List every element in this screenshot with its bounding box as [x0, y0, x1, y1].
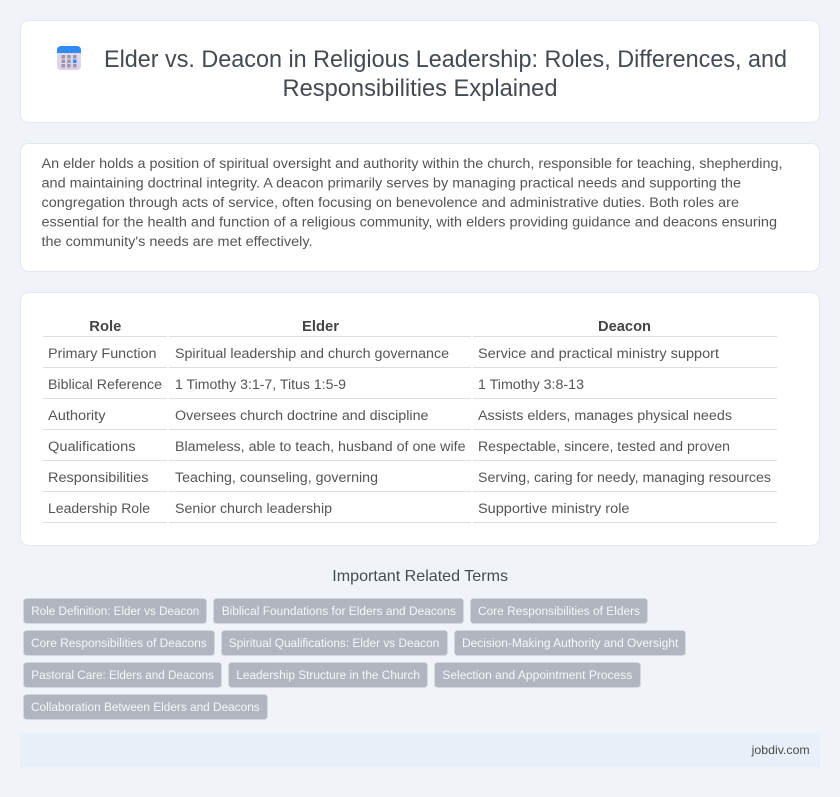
table row: primary function — [48, 346, 719, 362]
chip: core responsibilities of deacons: Core Responsibilities of Deacons — [31, 636, 207, 650]
title — [104, 46, 787, 102]
table row: biblical reference: 1 Timothy 3:1-7, Titus 1:5-9 — [175, 377, 346, 393]
panel: title header — [20, 20, 820, 122]
chip: spiritual qualifications: Spiritual Qualifications: Elder vs Deacon — [229, 636, 439, 650]
chip: spiritual qualifications — [222, 630, 448, 656]
chip: biblical foundations: Biblical Foundations for Elders and Deacons — [222, 604, 456, 618]
table row: qualifications: Qualifications — [48, 439, 136, 455]
table row: leadership role: Senior church leadership — [175, 501, 332, 517]
text block: elder and deacon summary — [42, 156, 782, 250]
title: Elder vs. Deacon in Religious Leadership: Roles, Differences, and — [104, 46, 787, 73]
table row: responsibilities — [48, 470, 771, 486]
chip: pastoral care — [24, 662, 222, 688]
text block: elder and deacon summary: the community's needs are met effectively. — [42, 234, 312, 250]
chip: core responsibilities of elders — [470, 598, 648, 624]
table header row: Elder — [302, 319, 339, 335]
table row: authority: Assists elders, manages physical needs — [478, 408, 732, 424]
table header row: Role — [89, 319, 121, 335]
table row: responsibilities: Serving, caring for needy, managing resources — [478, 470, 771, 486]
text block: elder and deacon summary: and maintaining doctrinal integrity. A deacon primarily serves by managing practical needs and supporting the — [42, 176, 741, 192]
table row: qualifications: Blameless, able to teach, husband of one wife — [175, 439, 466, 455]
heading: important related terms: Important Related Terms — [332, 568, 508, 585]
table row: primary function: Primary Function — [48, 346, 156, 362]
table row: authority — [48, 408, 732, 424]
table row: qualifications — [48, 439, 730, 455]
chip: pastoral care: Pastoral Care: Elders and Deacons — [31, 668, 214, 682]
chip: collaboration: Collaboration Between Elders and Deacons — [31, 700, 260, 714]
chip: leadership structure — [228, 662, 428, 688]
table row: authority: Oversees church doctrine and discipline — [175, 408, 429, 424]
footer: jobdiv.com — [751, 743, 810, 757]
table row: authority: Authority — [48, 408, 106, 424]
related terms chips — [24, 598, 686, 720]
chip: role definition — [24, 598, 206, 624]
table row: biblical reference: 1 Timothy 3:8-13 — [478, 377, 584, 393]
table row: primary function: Service and practical ministry support — [478, 346, 719, 362]
text block: elder and deacon summary: congregation through acts of service, often focusing on benevolence and administrative duties. Both roles are — [42, 195, 739, 211]
table header row — [89, 319, 651, 335]
table row: biblical reference: Biblical Reference — [48, 377, 162, 393]
panel: introduction text — [20, 144, 820, 272]
table row: qualifications: Respectable, sincere, tested and proven — [478, 439, 730, 455]
table row: primary function: Spiritual leadership and church governance — [175, 346, 449, 362]
chip: core responsibilities of elders: Core Responsibilities of Elders — [478, 604, 640, 618]
table row: leadership role: Leadership Role — [48, 501, 150, 517]
table header row: Deacon — [598, 319, 651, 335]
chip: decision-making authority: Decision-Making Authority and Oversight — [462, 636, 679, 650]
panel: comparison table — [20, 292, 820, 546]
table row: biblical reference — [48, 377, 584, 393]
chip: selection and appointment — [434, 662, 640, 688]
text block: elder and deacon summary: essential for the health and function of a religious community, with elders providing guidance and deacons ensuring — [42, 214, 777, 230]
chip: biblical foundations — [214, 598, 464, 624]
chip: leadership structure: Leadership Structure in the Church — [236, 668, 420, 682]
chip: decision-making authority — [454, 630, 686, 656]
table row: responsibilities: Responsibilities — [48, 470, 148, 486]
text block: elder and deacon summary: An elder holds a position of spiritual oversight and authority within the church, responsible for teaching, shepherding, — [42, 156, 782, 172]
chip: selection and appointment: Selection and Appointment Process — [442, 668, 632, 682]
title: Responsibilities Explained — [282, 75, 558, 102]
chip: role definition: Role Definition: Elder vs Deacon — [31, 604, 199, 618]
chip: core responsibilities of deacons — [24, 630, 214, 656]
table row: responsibilities: Teaching, counseling, governing — [175, 470, 378, 486]
footer — [20, 733, 820, 767]
table row: leadership role: Supportive ministry role — [478, 501, 630, 517]
chip: collaboration — [24, 694, 268, 720]
icon: calendar — [57, 46, 81, 70]
table row: leadership role — [48, 501, 630, 517]
